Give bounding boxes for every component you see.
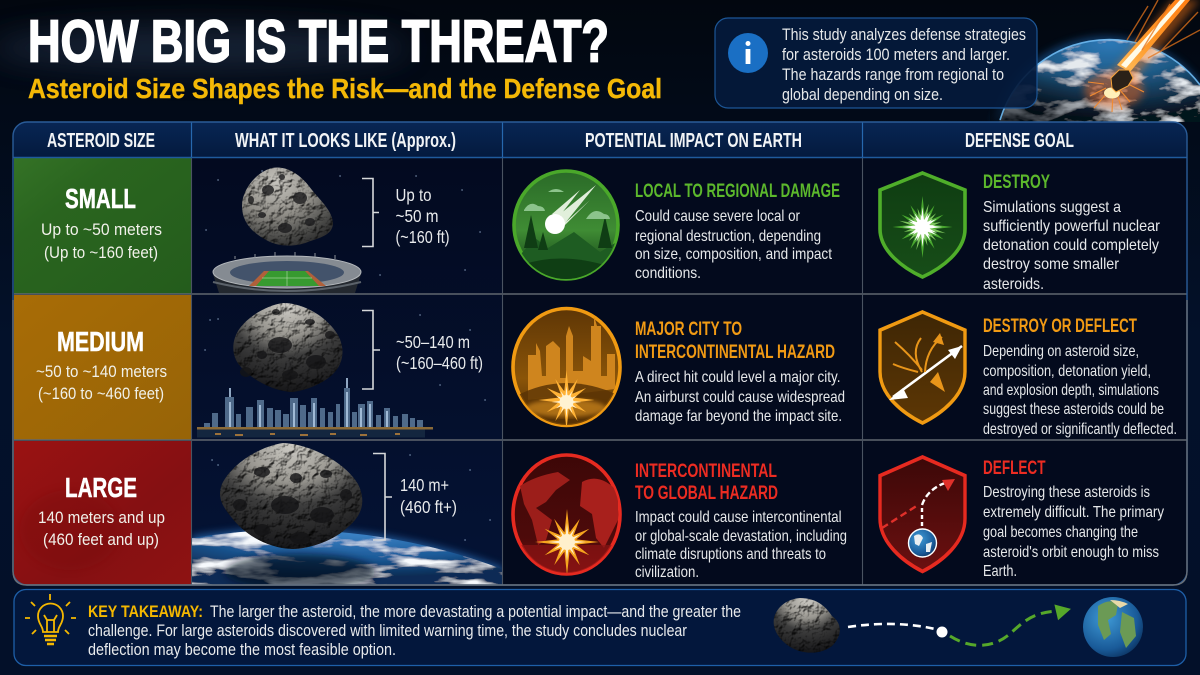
stadium	[213, 252, 361, 293]
impact: intercontinental to global hazard: civilization.	[635, 564, 699, 581]
key takeaway panel	[14, 590, 1186, 666]
row: medium label: MEDIUM	[57, 326, 144, 357]
defense: destroy	[880, 172, 1160, 293]
defense: destroy: Simulations suggest a	[983, 199, 1121, 216]
defense: deflect: extremely difficult. The primary	[983, 504, 1164, 521]
earth horizon under large asteroid	[192, 528, 502, 590]
size bracket: large: 140 m+	[400, 475, 449, 495]
defense: destroy: destroy some smaller	[983, 256, 1119, 273]
size bracket: medium: (~160–460 ft)	[396, 353, 483, 373]
impact: major city to intercontinental hazard: INTERCONTINENTAL HAZARD	[635, 342, 835, 363]
row: small label	[14, 158, 191, 294]
defense: destroy or deflect: Depending on asteroid size,	[983, 343, 1139, 360]
defense: destroy or deflect: composition, detonation yield,	[983, 363, 1151, 380]
green deflected trajectory	[950, 603, 1072, 645]
table header row: WHAT IT LOOKS LIKE (Approx.)	[235, 130, 456, 152]
impact: local to regional damage: LOCAL TO REGIONAL DAMAGE	[635, 181, 840, 202]
impact: local to regional damage: regional destruction, depending	[635, 228, 821, 245]
impact: intercontinental to global hazard: TO GLOBAL HAZARD	[635, 483, 778, 504]
impact: intercontinental to global hazard: INTERCONTINENTAL	[635, 461, 777, 482]
earth globe	[1083, 597, 1143, 657]
defense: destroy: sufficiently powerful nuclear	[983, 218, 1160, 235]
mini asteroid	[774, 598, 840, 653]
impact: major city to intercontinental hazard: A direct hit could level a major city.	[635, 369, 840, 386]
defense: destroy: DESTROY	[983, 172, 1050, 193]
impact: local to regional damage: on size, composition, and impact	[635, 246, 833, 263]
size bracket: small: ~50 m	[396, 206, 438, 226]
row: small label: SMALL	[65, 183, 136, 214]
impact: major city to intercontinental hazard	[513, 308, 845, 430]
takeaway text: The larger the asteroid, the more devastating a potential impact—and the greater the	[210, 603, 741, 621]
table header row: DEFENSE GOAL	[965, 130, 1074, 152]
defense: deflect: goal becomes changing the	[983, 524, 1138, 541]
emblem: exploding city	[513, 308, 620, 430]
table header row: ASTEROID SIZE	[47, 130, 155, 152]
info callout	[715, 18, 1037, 108]
takeaway text: challenge. For large asteroids discovered with limited warning time, the study concludes nuclear	[88, 622, 687, 640]
impact: local to regional damage	[514, 171, 840, 282]
white dashed approach path	[848, 624, 935, 629]
info text: The hazards range from regional to	[782, 66, 1004, 84]
info text: for asteroids 100 meters and larger.	[782, 46, 1010, 64]
size bracket: small: (~160 ft)	[396, 227, 450, 247]
impact: local to regional damage: conditions.	[635, 265, 701, 282]
impact: intercontinental to global hazard: or global-scale devastation, including	[635, 528, 847, 545]
info text	[782, 26, 1026, 104]
size bracket: small: Up to	[396, 185, 432, 205]
title: HOW BIG IS THE THREAT?	[28, 8, 609, 74]
defense: destroy: asteroids.	[983, 276, 1044, 293]
icon: red shield with deflected trajectory	[880, 457, 965, 571]
defense: destroy or deflect	[880, 312, 1177, 438]
info text: This study analyzes defense strategies	[782, 26, 1026, 44]
row: large label: 140 meters and up	[38, 508, 165, 527]
defense: deflect: Earth.	[983, 563, 1017, 580]
city skyline	[197, 378, 433, 438]
title glow	[0, 26, 410, 70]
icon: orange shield with deflection arrows	[880, 312, 965, 423]
impact: major city to intercontinental hazard: damage far beyond the impact site.	[635, 408, 842, 425]
size bracket: small	[362, 178, 450, 247]
row: large label: LARGE	[65, 472, 137, 503]
defense: deflect	[880, 457, 1164, 580]
small asteroid	[242, 168, 333, 246]
takeaway text: KEY TAKEAWAY:	[88, 602, 203, 621]
takeaway text: deflection may become the most feasible option.	[88, 641, 396, 659]
row: medium label	[14, 295, 191, 440]
icon: information	[728, 33, 768, 73]
takeaway text	[88, 602, 741, 659]
defense: deflect: DEFLECT	[983, 458, 1046, 479]
icon: lightbulb	[25, 594, 76, 644]
impact: major city to intercontinental hazard: MAJOR CITY TO	[635, 319, 742, 340]
impact: major city to intercontinental hazard: An airburst could cause widespread	[635, 389, 845, 406]
size bracket: medium	[362, 310, 483, 389]
info text: global depending on size.	[782, 86, 943, 104]
impact: intercontinental to global hazard: Impact could cause intercontinental	[635, 509, 842, 526]
size bracket: large: (460 ft+)	[400, 497, 457, 517]
subtitle: Asteroid Size Shapes the Risk—and the Defense Goal	[28, 73, 662, 104]
row: large label	[14, 441, 191, 585]
emblem: meteor over mountains	[514, 171, 620, 282]
large asteroid	[220, 443, 362, 549]
defense: destroy or deflect: DESTROY OR DEFLECT	[983, 316, 1137, 337]
impact: local to regional damage: Could cause severe local or	[635, 208, 800, 225]
deflection point	[936, 626, 948, 638]
defense: destroy: detonation could completely	[983, 237, 1159, 254]
row: small label: (Up to ~160 feet)	[44, 243, 158, 262]
icon: green shield with blast	[880, 173, 965, 277]
defense: deflect: Destroying these asteroids is	[983, 484, 1150, 501]
table header row	[13, 122, 1187, 157]
emblem: globe with explosion	[513, 455, 620, 575]
row: large label: (460 feet and up)	[43, 530, 159, 549]
stars	[205, 171, 490, 540]
row: small label: Up to ~50 meters	[41, 220, 162, 239]
impact: intercontinental to global hazard	[513, 455, 847, 581]
defense: deflect: asteroid's orbit enough to miss	[983, 544, 1159, 561]
row: medium label: ~50 to ~140 meters	[36, 362, 167, 381]
size column background for visuals	[192, 260, 502, 569]
medium asteroid	[233, 303, 343, 392]
earth and incoming meteor illustration	[990, 0, 1200, 122]
deflection path graphic	[774, 597, 1143, 657]
comparison table	[13, 122, 1187, 590]
size bracket: large	[373, 454, 457, 540]
impact: intercontinental to global hazard: climate disruptions and threats to	[635, 546, 826, 563]
size bracket: medium: ~50–140 m	[396, 332, 470, 352]
table header row: POTENTIAL IMPACT ON EARTH	[585, 130, 802, 152]
row: medium label: (~160 to ~460 feet)	[38, 384, 164, 403]
